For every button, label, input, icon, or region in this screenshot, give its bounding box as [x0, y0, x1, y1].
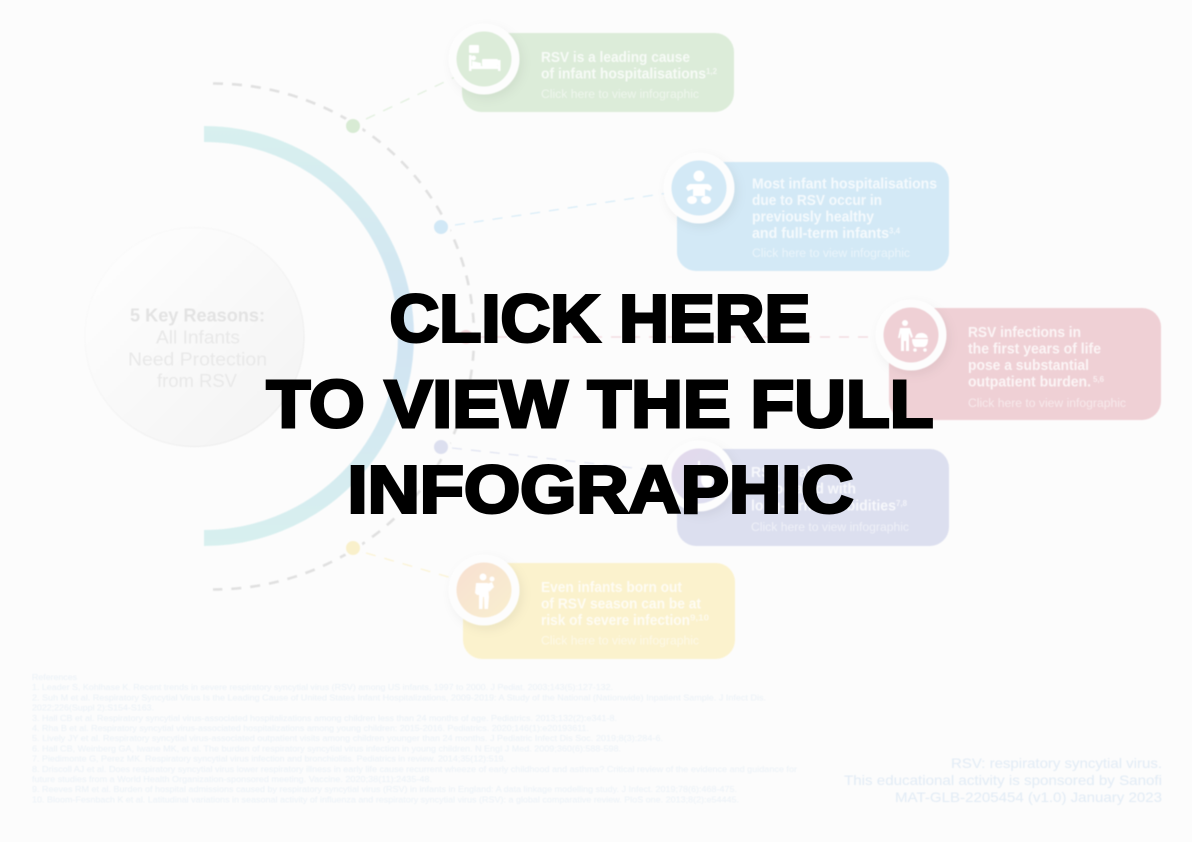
references block: 3. Hall CB et al. Respiratory syncytial virus-associated hospitalizations among children less than 24 months of age. Pediatrics. 2013;132(2):e341-8.	[32, 713, 617, 723]
references block: 7. Piedimonte G, Perez MK. Respiratory syncytial virus infection and bronchiolitis. Pediatrics in review. 2014;35(12):519.	[32, 754, 506, 764]
connector: blue	[455, 193, 668, 225]
badge ring	[664, 152, 734, 224]
link text: Click here to view infographic	[751, 520, 909, 534]
link text: Click here to view infographic	[541, 87, 699, 101]
badge fill	[884, 308, 938, 362]
footer note: RSV: respiratory syncytial virus.	[951, 755, 1162, 771]
connector: lavender	[452, 448, 670, 472]
icon: hospital bed	[469, 45, 500, 71]
text: card heading line 2: of infant hospitalisations	[541, 66, 706, 82]
connector: yellow	[366, 553, 452, 578]
text: line 2: of RSV season can be at	[541, 596, 701, 612]
badge ring	[448, 554, 520, 626]
overlay headline: click here to view the full infographic: INFOGRAPHIC	[348, 452, 854, 528]
panel: long-term morbidities card	[664, 440, 949, 546]
footer note: This educational activity is sponsored by Sanofi	[844, 772, 1162, 788]
node: yellow	[344, 540, 362, 556]
connector: pink	[478, 336, 878, 338]
references block: 10. Bloom-Fesnbach K et al. Latitudinal variations in seasonal activity of influenza and respiratory syncytial virus (RSV): a global comparative review. PloS one. 2013;8(2):e54445.	[32, 794, 739, 804]
badge ring	[448, 24, 520, 94]
text: card heading line 1: RSV is a leading cause	[541, 50, 690, 66]
link text: Click here to view infographic	[752, 246, 910, 260]
text: line 3: previously healthy	[752, 210, 875, 226]
references block: 2022;226(Suppl 2):S154-S163.	[32, 703, 154, 713]
dashed grey arc	[213, 84, 474, 590]
link text: Click here to view infographic	[541, 634, 699, 648]
badge fill	[456, 32, 512, 86]
connector: green	[366, 77, 455, 119]
text: need protection: Need Protection	[128, 348, 267, 370]
references block: 1. Leader S, Kohlhase K. Recent trends in severe respiratory syncytial virus (RSV) among US infants, 1997 to 2000. J Pediat. 2003;143(5):127-132.	[32, 682, 613, 692]
panel: healthy infants card	[664, 152, 949, 271]
superscript: 3,4	[889, 226, 901, 236]
footer note: MAT-GLB-2205454 (v1.0) January 2023	[895, 789, 1162, 805]
references block: 8. Driscoll AJ et al. Does respiratory syncytial virus lower respiratory illness in early life cause recurrent wheeze of early childhood and asthma? Critical review of the evidence and guidance for	[32, 764, 797, 774]
text: line 1: RSV infections in	[968, 325, 1081, 341]
references block: 9. Reeves RM et al. Burden of hospital admissions caused by respiratory syncytial virus (RSV) in infants in England: A data linkage modelling study. J Infect. 2019;78(6):468-475.	[32, 784, 737, 794]
text: line 1: Even infants born out	[541, 580, 682, 596]
panel: out of season card	[448, 554, 735, 659]
link text: Click here to view infographic	[968, 396, 1126, 410]
references block: 6. Hall CB, Weinberg GA, Iwane MK, et al. The burden of respiratory syncytial virus infection in young children. N Engl J Med. 2009;360(6):588-598.	[32, 743, 621, 753]
superscript: 1,2	[706, 67, 718, 76]
text: line 1: RSV is also	[751, 465, 827, 481]
node: lavender	[432, 438, 450, 456]
heading: 5 key reasons: 5 Key Reasons:	[130, 304, 265, 326]
text: line 3: long-term morbidities	[751, 498, 896, 514]
overlay headline: click here to view the full infographic: CLICK HERE	[390, 282, 810, 356]
references block: future studies from a World Health Organization-sponsored meeting. Vaccine. 2020;38(11):2435-48.	[32, 774, 432, 784]
references block: References	[32, 672, 77, 682]
panel: central circle	[85, 228, 304, 446]
overlay headline: click here to view the full infographic: TO VIEW THE FULL	[266, 367, 934, 442]
blue gradient arc	[204, 134, 406, 538]
superscript: 5,6	[1093, 375, 1105, 384]
footer note	[844, 755, 1162, 805]
badge ring	[664, 440, 734, 512]
icon: baby	[686, 170, 712, 204]
text: line 1: Most infant hospitalisations	[752, 176, 937, 192]
overlay headline: click here to view the full infographic	[266, 282, 934, 528]
node: green	[344, 118, 362, 134]
text: line 4: and full-term infants	[752, 226, 889, 242]
text: all infants: All Infants	[156, 326, 240, 348]
references block	[32, 672, 797, 804]
icon: lungs	[685, 461, 713, 488]
text: line 2: due to RSV occur in	[752, 193, 882, 209]
text: from RSV: from RSV	[157, 370, 238, 391]
panel: outpatient burden card	[876, 300, 1161, 420]
text: line 3: pose a substantial	[968, 358, 1089, 374]
badge fill	[672, 160, 726, 216]
text: line 4: outpatient burden.	[968, 374, 1091, 390]
icon: parent with pram	[898, 320, 928, 352]
icon: adult holding infant	[475, 574, 494, 609]
node: pink	[458, 328, 474, 346]
badge ring	[876, 300, 946, 370]
references block: 2. Suh M et al. Respiratory Syncytial Virus Is the Leading Cause of United States Infant Hospitalizations, 2009-2019: A Study of the National (Nationwide) Inpatient Sample. J Infect Dis.	[32, 692, 766, 702]
panel: leading cause card	[448, 24, 734, 112]
text: line 2: associated with	[751, 482, 856, 498]
superscript: 7,8	[896, 499, 908, 508]
text: line 3: risk of severe infection	[541, 613, 690, 629]
references block: 5. Lively JY et al. Respiratory syncytial virus-associated outpatient visits among children younger than 24 months. J Pediatric Infect Dis Soc. 2019;8(3):284-6.	[32, 733, 663, 743]
badge fill	[456, 562, 512, 618]
superscript: 9,10	[690, 614, 710, 622]
node: blue	[432, 218, 450, 236]
badge fill	[672, 448, 726, 504]
references block: 4. Rha B et al. Respiratory syncytial virus-associated hospitalizations among young children: 2015-2016. Pediatrics. 2020;146(1):e20193611.	[32, 723, 589, 733]
text: line 2: the first years of life	[968, 342, 1101, 358]
